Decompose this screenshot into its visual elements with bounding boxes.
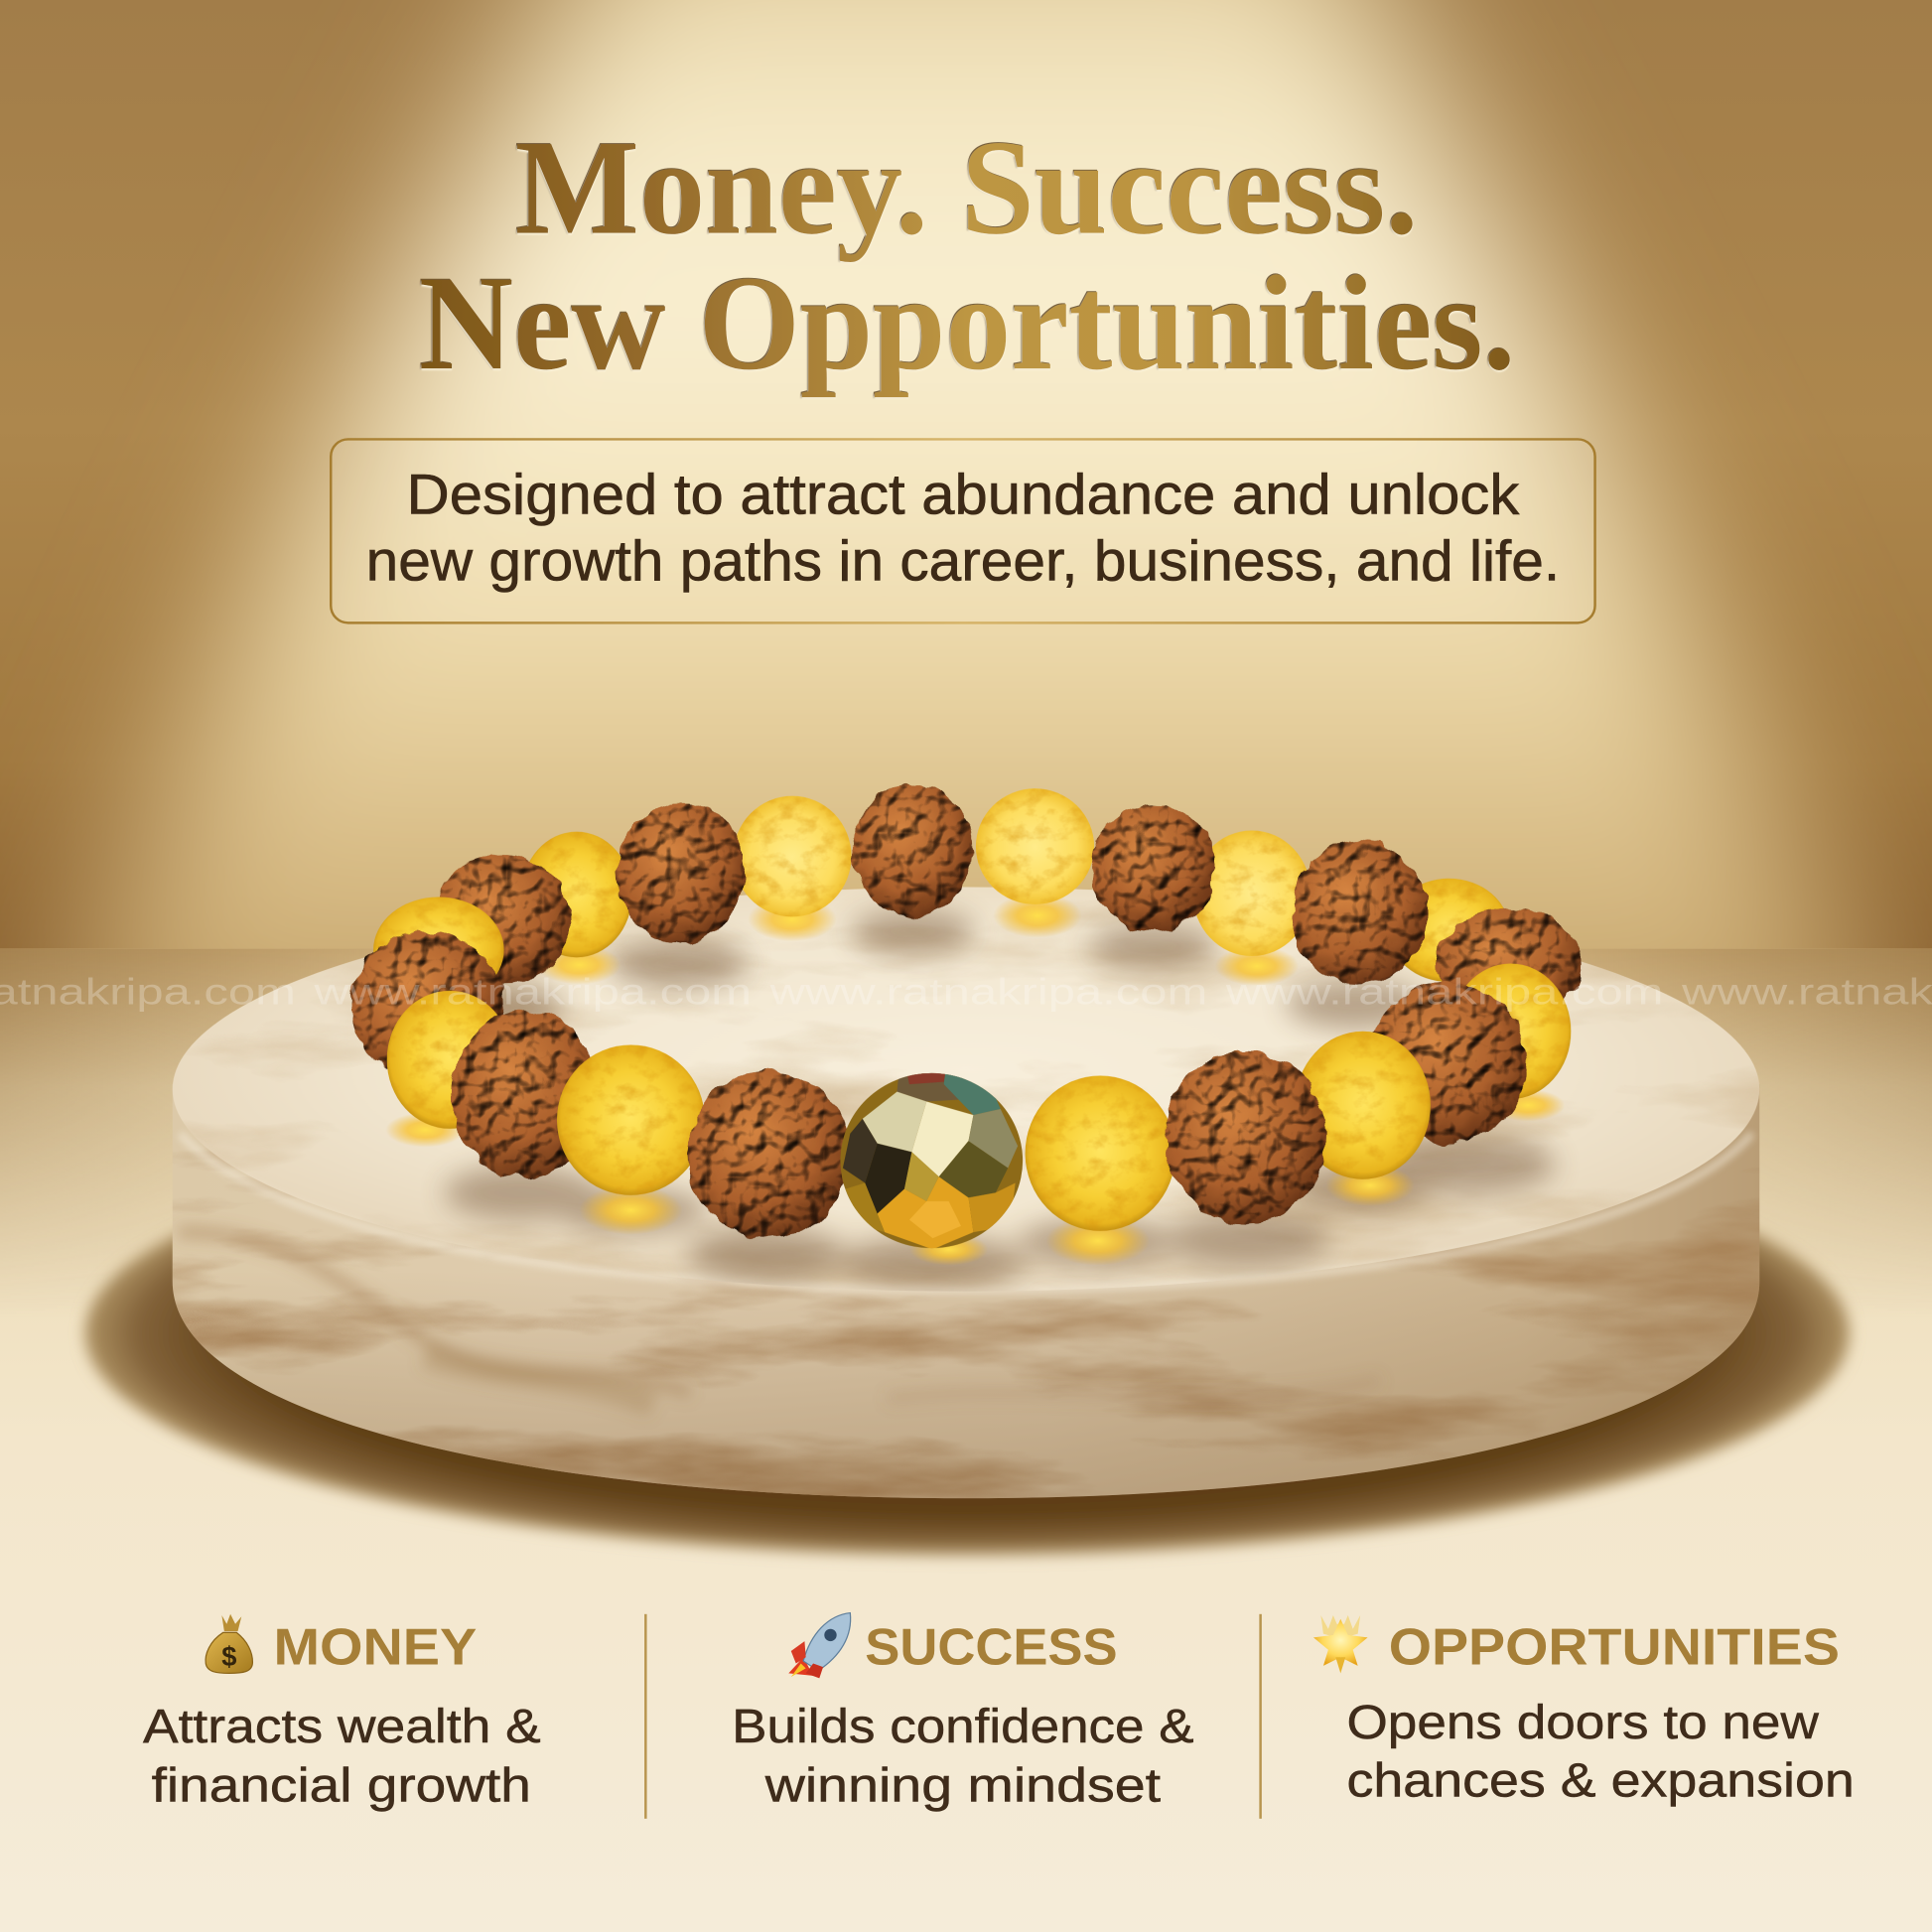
watermark: www.ratnakripa.com: [1225, 970, 1663, 1012]
pedestal front rim highlight: [180, 1134, 1752, 1290]
marble veins on side: [175, 1219, 1106, 1417]
watermark: www.ratnakripa.com: [768, 970, 1207, 1012]
pedestal side shading: [173, 1084, 1759, 1498]
citrine bead, back: [733, 796, 852, 916]
description: success: [732, 1700, 1194, 1812]
rudraksha bead, far right: [1436, 909, 1584, 1021]
citrine bead, back: [521, 832, 632, 957]
bead shadows on marble: [435, 909, 1555, 1287]
background floor: [0, 949, 1932, 1932]
title: New Opportunities.: [419, 247, 1516, 398]
citrine bead, far right: [1450, 964, 1571, 1099]
subtitle callout box: Designed to attract abundance and unlock: [407, 464, 1520, 527]
pedestal cast shadow: [85, 1111, 1850, 1555]
rudraksha bead, right: [1369, 983, 1527, 1144]
citrine bead, front: [1026, 1075, 1175, 1231]
icon: money bag: $: [221, 1641, 236, 1672]
description: success: Builds confidence &: [732, 1700, 1194, 1753]
icon: glowing star: [1313, 1615, 1368, 1673]
faceted hematite centre bead: [840, 1072, 1023, 1249]
subtitle callout box: new growth paths in career, business, and life.: [366, 530, 1560, 594]
citrine bead, back right: [1389, 879, 1509, 982]
citrine bead, back: [976, 788, 1094, 904]
watermark: www.ratnakripa.com: [313, 970, 752, 1012]
bracelet: [349, 783, 1584, 1266]
pedestal top surface: [173, 888, 1759, 1292]
citrine bead, right front: [1295, 1032, 1431, 1179]
divider: [1259, 1614, 1262, 1819]
citrine bead, left front: [557, 1044, 705, 1195]
description: success: winning mindset: [764, 1758, 1162, 1812]
description: opportunities: Opens doors to new: [1346, 1696, 1820, 1749]
citrine bead, left: [387, 991, 512, 1129]
heading: success: SUCCESS: [865, 1619, 1118, 1677]
background wall with spotlight: [0, 0, 1932, 949]
title: Money. Success.: [515, 112, 1418, 263]
description: money: [143, 1700, 541, 1812]
rudraksha bead, back centre: [853, 783, 973, 916]
description: money: Attracts wealth &: [143, 1700, 541, 1753]
feature: success: [732, 1613, 1194, 1812]
subtitle callout box: [331, 439, 1595, 622]
citrine bead, back right: [1192, 830, 1311, 956]
description: opportunities: chances & expansion: [1346, 1753, 1855, 1807]
rudraksha bead, far left: [435, 855, 571, 986]
icon: money bag: [206, 1614, 252, 1673]
citrine bead, back left: [373, 897, 504, 1003]
pedestal side: [173, 1084, 1759, 1498]
rudraksha bead, back: [1092, 803, 1215, 931]
rudraksha bead, far left: [349, 931, 502, 1079]
rudraksha bead, back right: [1292, 842, 1427, 985]
marble pedestal: [173, 888, 1759, 1498]
rudraksha bead, front left: [688, 1070, 850, 1238]
heading: opportunities: OPPORTUNITIES: [1389, 1619, 1840, 1677]
divider: [644, 1614, 647, 1819]
icon: rocket: [788, 1613, 851, 1678]
rudraksha bead, back: [617, 803, 745, 944]
title: [419, 112, 1516, 398]
feature: opportunities: [1313, 1615, 1855, 1807]
amber light glows under citrine beads: [385, 894, 1565, 1266]
rudraksha bead, front right: [1165, 1051, 1327, 1223]
watermark: [0, 970, 1932, 1012]
rudraksha bead, left: [451, 1011, 599, 1177]
description: opportunities: [1346, 1696, 1855, 1807]
feature: money: [143, 1614, 541, 1812]
heading: money: MONEY: [274, 1619, 477, 1677]
description: money: financial growth: [152, 1758, 531, 1812]
